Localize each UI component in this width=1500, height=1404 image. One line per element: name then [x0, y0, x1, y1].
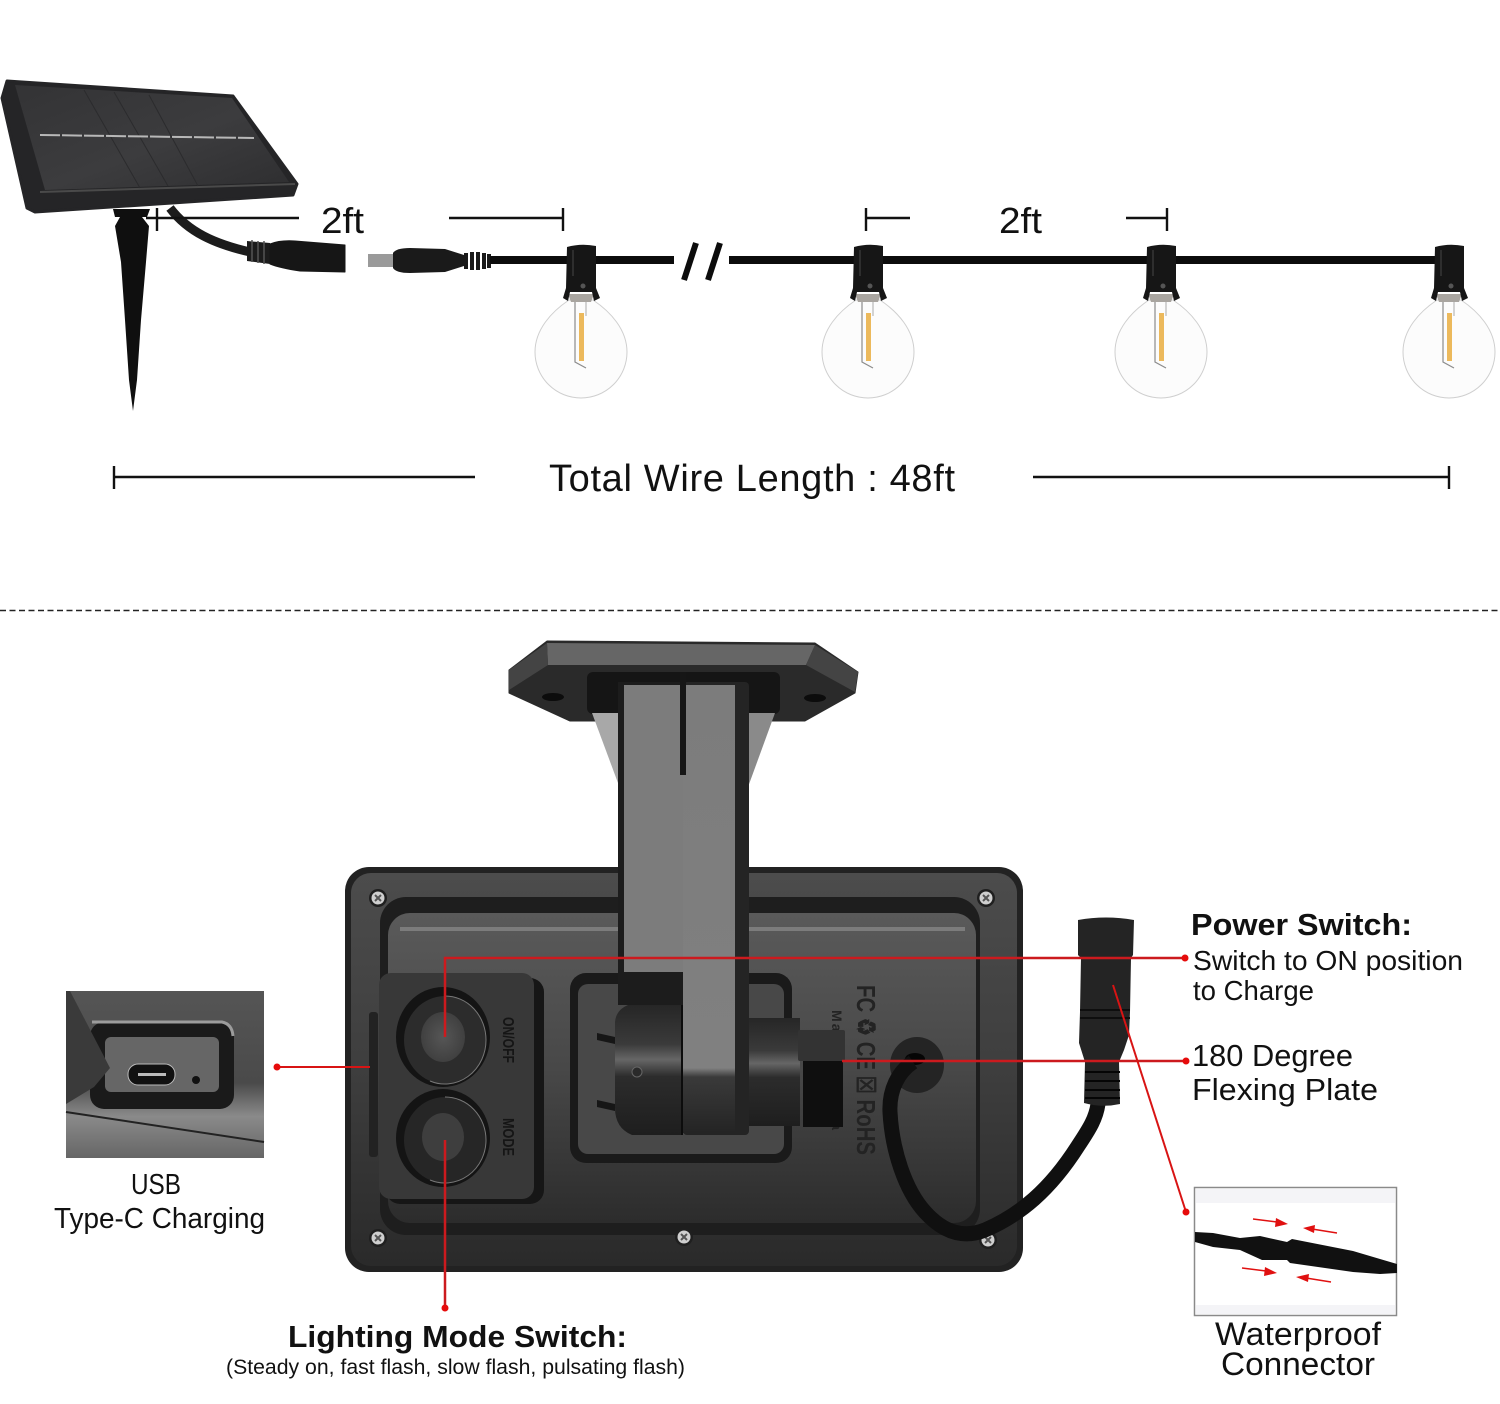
- lighting mode label: Lighting Mode Switch:: [288, 1319, 627, 1354]
- usb side cover: [369, 1012, 378, 1157]
- waterproof leader: [1113, 985, 1190, 1216]
- waterproof connector photo: [1194, 1188, 1397, 1316]
- ground stake: [113, 209, 150, 411]
- usb port recess: [90, 1022, 234, 1109]
- panel cable: [170, 208, 250, 252]
- red callout lines: [274, 954, 1190, 1312]
- certification marks: FC ♻ CE ☒ RoHS: [851, 985, 881, 1155]
- button labels: ON/OFF: [499, 1017, 516, 1063]
- solar panel body: [2, 81, 297, 212]
- dimension 2ft right: 2ft: [999, 200, 1042, 241]
- flexing plate label: 180 Degree: [1192, 1038, 1353, 1073]
- break mark: [684, 243, 720, 280]
- mounting bracket and back plate: [345, 641, 1134, 1272]
- dc plug: [368, 248, 491, 273]
- solar panel cells: [15, 85, 289, 190]
- power switch leader: [445, 954, 1188, 1037]
- joined connector: [1195, 1232, 1397, 1274]
- total wire length: Total Wire Length : 48ft: [549, 458, 955, 500]
- waterproof label: Connector: [1221, 1346, 1375, 1382]
- power switch label: to Charge: [1193, 975, 1314, 1006]
- red arrows: [1253, 1219, 1337, 1233]
- usb-c socket: [128, 1064, 175, 1085]
- total wire length: [114, 458, 1449, 500]
- usb label: [54, 1169, 265, 1235]
- bulb 1: [535, 245, 627, 398]
- screws: [369, 889, 997, 1249]
- cover flap: [66, 991, 110, 1104]
- button panel: MODE: [499, 1118, 516, 1156]
- usb leader: [274, 1064, 370, 1070]
- on off button: [396, 987, 490, 1087]
- bracket arm: [618, 672, 749, 1135]
- small print: Made in China: [829, 1010, 845, 1130]
- solar panel on stake: [2, 81, 345, 411]
- lighting mode label: [226, 1319, 685, 1379]
- lighting mode leader: [442, 1140, 448, 1312]
- bulb 2: [822, 245, 914, 398]
- usb label: USB: [131, 1169, 181, 1201]
- usb label: Type-C Charging: [54, 1203, 265, 1235]
- dimension 2ft left: 2ft: [321, 200, 364, 241]
- back plate: [345, 867, 1023, 1272]
- panel bus bar: [40, 135, 254, 138]
- mode button: [396, 1089, 490, 1187]
- string light wire: [490, 243, 1449, 280]
- power switch label: [1191, 907, 1463, 1006]
- flexing plate label: Flexing Plate: [1192, 1072, 1378, 1107]
- center recess: [570, 973, 792, 1163]
- flexing plate label: [1192, 1038, 1378, 1107]
- top mounting plate: [509, 641, 858, 787]
- cable with waterproof connector: [890, 918, 1134, 1234]
- dimension 2ft left: [146, 200, 563, 241]
- lighting mode label: (Steady on, fast flash, slow flash, pulsating flash): [226, 1356, 685, 1379]
- bulb 4: [1403, 245, 1495, 398]
- dimension 2ft right: [866, 200, 1167, 241]
- button panel: [379, 973, 544, 1204]
- hinge: [615, 1005, 845, 1135]
- usb type-c photo: [66, 991, 264, 1158]
- bulb 3: [1115, 245, 1207, 398]
- cable grommet: [890, 1037, 944, 1093]
- power switch label: Power Switch:: [1191, 907, 1412, 942]
- waterproof label: Waterproof: [1215, 1316, 1381, 1352]
- flexing plate leader: [842, 1058, 1190, 1064]
- power switch label: Switch to ON position: [1193, 945, 1463, 976]
- female connector: [247, 240, 345, 272]
- waterproof label: [1215, 1316, 1381, 1382]
